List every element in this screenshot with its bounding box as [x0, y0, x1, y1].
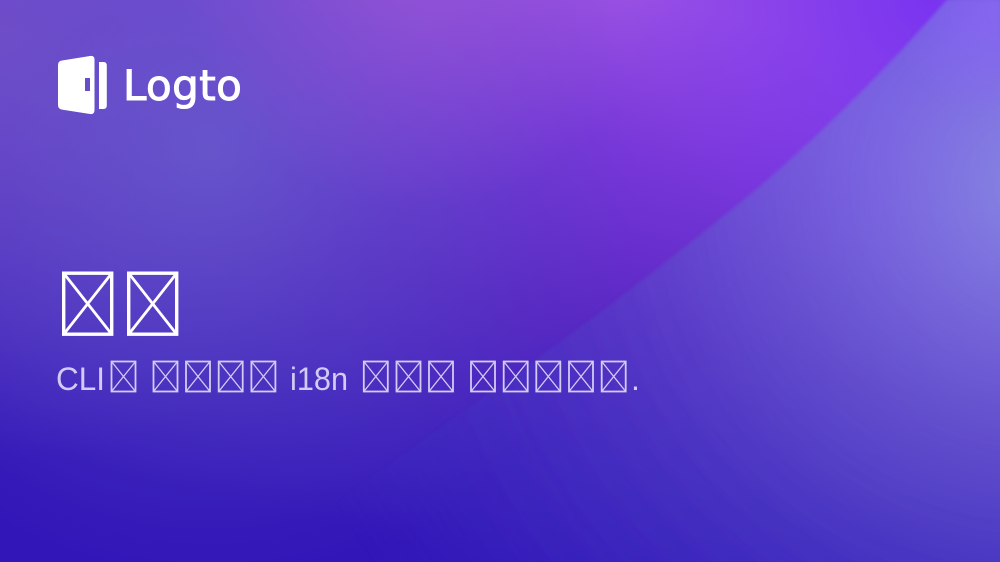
title: unrendered glyph boxes — [64, 273, 177, 334]
wordmark: Logto — [123, 61, 242, 110]
subtitle text: CLI: CLI — [56, 361, 105, 397]
subtitle glyph boxes: second group — [364, 362, 453, 392]
subtitle text: period: . — [631, 361, 640, 397]
logo — [58, 56, 242, 114]
subtitle glyph boxes: third group — [471, 362, 626, 392]
subtitle — [56, 361, 640, 397]
subtitle text: i18n: i18n — [290, 361, 348, 397]
icon: door — [58, 56, 107, 114]
subtitle glyph boxes: first group — [112, 362, 275, 392]
